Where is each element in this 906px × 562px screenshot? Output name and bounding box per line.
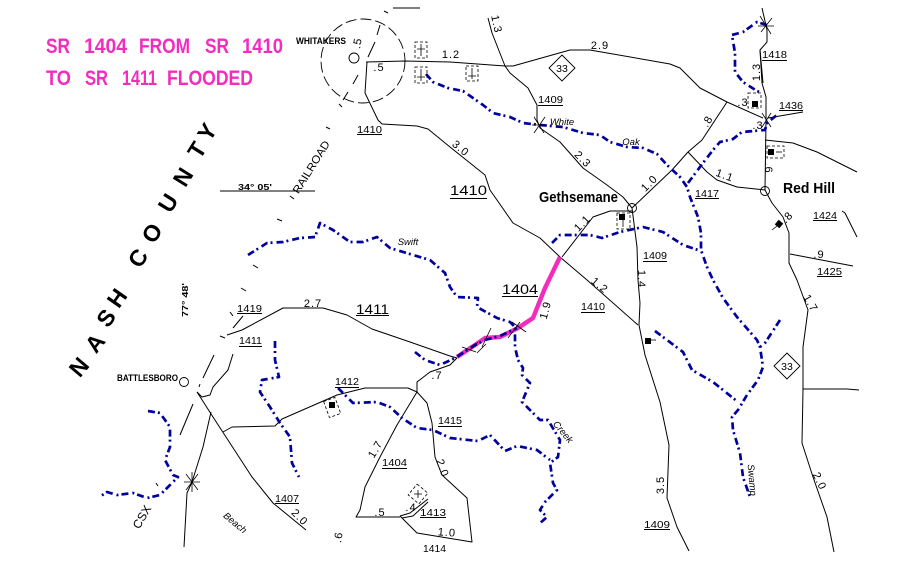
title: flooded road note: TO — [46, 67, 71, 90]
underlined road numbers: 1410 — [357, 124, 382, 136]
mileage numbers: 1.2 — [442, 49, 460, 61]
mileage numbers: 2.0 — [289, 507, 310, 528]
town circles — [180, 186, 770, 386]
stream and feature names: RAILROAD — [291, 139, 333, 196]
mileage numbers — [289, 14, 828, 544]
underlined road numbers: 1404 — [382, 457, 407, 469]
title: flooded road note: SR — [85, 67, 108, 90]
county name: NASH COUNTY: O — [136, 219, 168, 247]
mileage numbers: 1.7 — [800, 293, 820, 314]
mileage numbers: 2.9 — [591, 40, 609, 52]
coordinates: 34° 05' — [238, 182, 272, 192]
stream and feature names — [130, 117, 758, 536]
Whitakers town limit circle — [321, 19, 405, 103]
mileage numbers: 2.3 — [572, 149, 593, 170]
underlined road numbers: 1409 — [644, 519, 670, 531]
railroad ticks — [156, 11, 388, 486]
underlined road numbers: 1417 — [695, 188, 719, 200]
stream and feature names: Oak — [622, 137, 641, 148]
road network — [184, 8, 859, 552]
title: flooded road note: 1404 — [84, 35, 127, 58]
title: flooded road note — [46, 35, 283, 90]
underlined road numbers: 1411 — [356, 301, 389, 317]
mileage numbers: 1.3 — [751, 63, 763, 81]
mileage numbers: 1.7 — [366, 439, 386, 460]
county name: NASH COUNTY: H — [102, 284, 132, 312]
mileage numbers: .6 — [332, 531, 346, 544]
mileage numbers: .3 — [737, 97, 749, 109]
mileage numbers: 1.4 — [635, 270, 647, 288]
mileage numbers: .5 — [373, 62, 385, 74]
stream and feature names: Swift — [398, 237, 419, 248]
place names: Red Hill — [783, 180, 835, 197]
county name: NASH COUNTY: N — [64, 352, 94, 382]
title: flooded road note: 1411 — [122, 67, 157, 90]
route 33 shields: 33 — [781, 361, 793, 373]
mileage numbers: .9 — [813, 249, 825, 261]
mileage numbers: .5 — [351, 37, 365, 50]
mileage numbers: 2.7 — [304, 298, 322, 310]
place names: WHITAKERS — [296, 36, 346, 47]
underlined road numbers: 1404 — [502, 281, 538, 297]
mileage numbers: .5 — [374, 507, 386, 519]
building symbols — [324, 42, 784, 504]
county name: NASH COUNTY: T — [182, 137, 212, 163]
stream and feature names: Creek — [550, 419, 576, 447]
route 33 shields — [549, 55, 800, 379]
mileage numbers: 3.0 — [449, 138, 471, 159]
bridge marks — [184, 16, 774, 492]
mileage numbers: .8 — [780, 210, 796, 226]
underlined road numbers: 1415 — [438, 415, 462, 427]
county name: NASH COUNTY: U — [153, 189, 183, 217]
stream and feature names: CSX — [130, 503, 154, 531]
streams — [101, 22, 780, 524]
county name: NASH COUNTY: Y — [192, 119, 222, 145]
mileage numbers: .3 — [752, 120, 764, 132]
underlined road numbers: 1411 — [239, 335, 262, 347]
coordinates — [180, 182, 272, 317]
mileage numbers: .7 — [431, 370, 443, 382]
mileage numbers: 2.0 — [433, 458, 451, 479]
place names: Gethsemane — [539, 189, 618, 206]
title: flooded road note: SR — [205, 35, 229, 58]
route 33 shields: 33 — [556, 63, 568, 75]
underlined road numbers: 1410 — [581, 301, 605, 313]
underlined road numbers: 1412 — [335, 376, 359, 388]
county name: NASH COUNTY: A — [80, 328, 110, 358]
county name: NASH COUNTY: C — [123, 244, 153, 272]
title: flooded road note: FLOODED — [167, 67, 253, 90]
underlined road numbers: 1414 — [423, 543, 446, 555]
title: flooded road note: SR — [46, 35, 70, 58]
underlined road numbers: 1407 — [275, 493, 299, 505]
mileage numbers: 1.9 — [538, 300, 554, 321]
mileage numbers: 1.2 — [588, 275, 610, 296]
underlined road numbers — [237, 49, 842, 555]
mileage numbers: 1.1 — [714, 167, 735, 185]
title: flooded road note: 1410 — [242, 35, 283, 58]
underlined road numbers: 1436 — [779, 100, 803, 112]
underlined road numbers: 1409 — [538, 94, 563, 106]
underlined road numbers: 1410 — [450, 182, 487, 198]
mileage numbers: 3.5 — [655, 476, 667, 494]
county name: NASH COUNTY — [64, 119, 222, 382]
stream and feature names: White — [550, 117, 574, 128]
underlined road numbers: 1413 — [420, 507, 446, 519]
place names — [117, 36, 835, 384]
mileage numbers: 2.0 — [810, 471, 828, 492]
place names: BATTLESBORO — [117, 373, 178, 384]
mileage numbers: 1.1 — [572, 213, 593, 234]
coordinates: 77° 48' — [180, 283, 190, 317]
county name: NASH COUNTY: S — [91, 304, 121, 332]
underlined road numbers: 1409 — [643, 250, 667, 262]
stream and feature names: Beach — [221, 511, 249, 536]
mileage numbers: 1.3 — [488, 14, 504, 34]
mileage numbers: 1.0 — [437, 526, 457, 540]
underlined road numbers: 1419 — [237, 303, 262, 315]
mileage numbers: .4 — [405, 502, 417, 514]
mileage numbers: .8 — [700, 114, 716, 129]
underlined road numbers: 1424 — [813, 210, 837, 222]
flooded road segment — [457, 257, 560, 357]
underlined road numbers: 1425 — [817, 266, 842, 278]
mileage numbers: 1.0 — [639, 173, 660, 194]
underlined road numbers: 1418 — [762, 49, 787, 61]
county name: NASH COUNTY: N — [168, 163, 198, 191]
title: flooded road note: FROM — [139, 35, 190, 58]
stream and feature names: Swamp — [745, 464, 758, 496]
mileage numbers: .6 — [762, 162, 774, 174]
